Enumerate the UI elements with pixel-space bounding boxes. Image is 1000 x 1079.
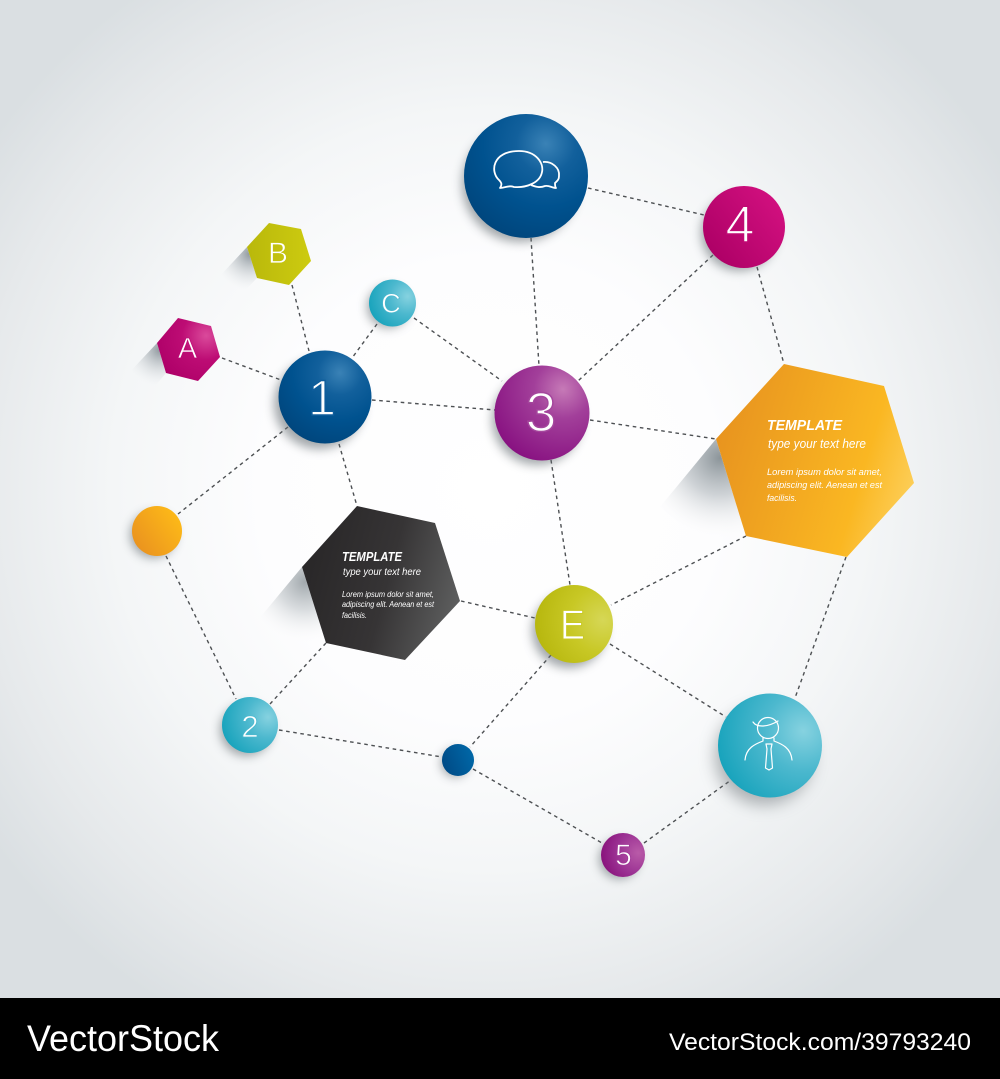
icon: person with tie [745,718,792,770]
circle drop shadows [130,126,777,879]
node: orange dot [132,506,182,556]
hexagon B: B [268,237,288,270]
image id: VectorStock.com/39793240 [669,1029,971,1056]
text block: dark hexagon template: Lorem ipsum dolor sit amet, [342,590,434,599]
text block: dark hexagon template: adipiscing elit. Aenean et est [342,600,435,609]
text block: dark hexagon template [342,550,435,620]
text block: orange hexagon template [767,418,882,504]
node: 4 [703,186,785,268]
text block: dark hexagon template: facilisis. [342,611,367,620]
text block: dark hexagon template: type your text here [343,566,421,578]
icon: speech bubbles [494,151,559,188]
dashed connector network [166,188,846,843]
node: 3: 3 [526,381,556,443]
text block: orange hexagon template: adipiscing elit. Aenean et est [767,480,882,491]
node: chat circle [464,114,588,238]
hexagon B [247,223,311,285]
text block: orange hexagon template: type your text here [768,437,866,451]
panel: orange hexagon [716,364,914,557]
node: 5: 5 [615,839,632,872]
text block: orange hexagon template: TEMPLATE [767,418,843,434]
node: 5 [601,833,645,877]
panel: dark hexagon [302,506,460,660]
footer bar [0,998,1000,1079]
node: C [369,280,416,326]
text block: orange hexagon template: facilisis. [767,493,797,504]
logo text: VectorStock [27,1018,219,1059]
hexagon A [157,318,220,381]
person circle shadow [715,707,813,805]
node: person circle [718,694,822,798]
node: E: E [560,601,585,648]
hexagon A: A [178,333,198,365]
node: small blue dot [442,744,474,776]
node: 1 [278,350,372,444]
node: E [535,585,613,663]
long shadows behind hexagons [127,247,746,658]
text block: dark hexagon template: TEMPLATE [342,550,403,564]
text block: orange hexagon template: Lorem ipsum dolor sit amet, [767,467,882,478]
node: 4: 4 [726,196,754,254]
node: 3 [494,366,590,460]
node: 2 [222,697,278,753]
node: 1: 1 [308,370,336,426]
node: 2: 2 [241,709,259,744]
node: C: C [381,288,401,318]
